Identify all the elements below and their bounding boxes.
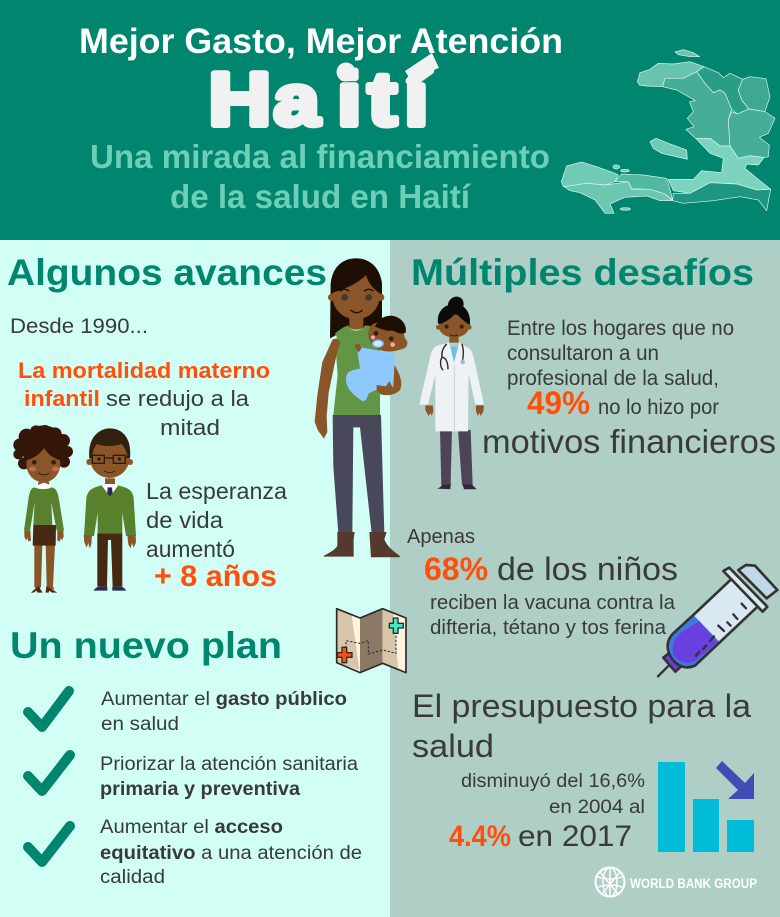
text: vacuna: Apenas [407, 526, 475, 548]
text: esperanza de vida: La esperanza [146, 478, 287, 504]
logo: World Bank Group [596, 867, 757, 897]
item: atención primaria [28, 754, 358, 800]
item: gasto público: Aumentar el gasto público [101, 689, 347, 710]
subtitle [90, 138, 550, 215]
woman [13, 425, 73, 593]
item: acceso equitativo: calidad [100, 867, 165, 888]
text: vacuna: de los niños [497, 551, 678, 587]
text: mortalidad materno infantil: La mortalidad materno [18, 358, 270, 383]
icon: woman and man [13, 425, 136, 593]
arrow: down [716, 761, 754, 799]
text: presupuesto: en 2004 al [549, 797, 645, 818]
icon: map [337, 609, 406, 673]
text: vacuna: reciben la vacuna contra la [430, 592, 676, 614]
item: acceso equitativo: equitativo a una atención de [100, 843, 362, 864]
heading: Un nuevo plan: Un nuevo plan [10, 625, 282, 666]
man [84, 428, 136, 591]
item: gasto público [28, 689, 347, 735]
panel: left background [0, 240, 390, 917]
panel: right background [390, 240, 780, 917]
text: vacuna [407, 526, 678, 639]
text: hogares: 49% [527, 385, 590, 421]
chart: falling bars [658, 761, 754, 852]
text: vacuna: 68% [424, 551, 488, 587]
logo: World Bank Group: WORLD BANK GROUP [630, 876, 757, 891]
text: esperanza de vida: aumentó [146, 536, 235, 562]
icon: check [28, 691, 69, 727]
heading: Algunos avances: Algunos avances [7, 252, 327, 293]
icon: mother and baby [315, 258, 484, 557]
text: mortalidad materno infantil: mitad [160, 415, 220, 440]
text: mortalidad materno infantil [18, 358, 270, 440]
icon: syringe [657, 565, 777, 677]
text: esperanza de vida: + 8 años [154, 560, 277, 593]
icon: check [28, 755, 70, 791]
text: Desde 1990: Desde 1990... [10, 315, 148, 338]
text: hogares: consultaron a un [507, 342, 659, 365]
text: mortalidad materno infantil: se redujo a la [106, 386, 250, 411]
item: atención primaria: primaria y preventiva [100, 779, 300, 800]
title: Mejor Gasto: Mejor Gasto, Mejor Atención [79, 22, 563, 61]
item: gasto público: en salud [101, 714, 179, 735]
panel: header [0, 0, 780, 240]
text: hogares: Entre los hogares que no [507, 317, 734, 340]
text: presupuesto: en 2017 [518, 820, 632, 853]
title: Haití: Haití [208, 58, 431, 142]
doctor [419, 297, 484, 489]
text: hogares: motivos financieros [482, 423, 776, 460]
text: hogares: no lo hizo por [598, 396, 719, 419]
item: acceso equitativo [28, 817, 362, 888]
subtitle: de la salud en Haití [170, 178, 472, 215]
text: presupuesto: disminuyó del 16,6% [461, 771, 645, 792]
text: hogares [482, 317, 776, 460]
text: presupuesto: salud [412, 728, 494, 764]
text: presupuesto [412, 688, 751, 853]
text: esperanza de vida: de vida [146, 507, 223, 533]
subtitle: Una mirada al financiamiento [90, 138, 550, 175]
text: vacuna: difteria, tétano y tos ferina [430, 617, 667, 639]
text: esperanza de vida [146, 478, 287, 593]
text: presupuesto: El presupuesto para la [412, 688, 751, 724]
map of Haiti [561, 50, 775, 213]
plan items [28, 689, 362, 888]
text: mortalidad materno infantil: infantil [24, 386, 100, 411]
item: acceso equitativo: Aumentar el acceso [100, 817, 283, 838]
text: hogares: profesional de la salud, [507, 367, 719, 390]
item: atención primaria: Priorizar la atención sanitaria [100, 754, 358, 775]
text: presupuesto: 4.4% [449, 820, 511, 853]
icon: check [28, 826, 70, 862]
heading: Múltiples desafíos: Múltiples desafíos [411, 252, 754, 293]
